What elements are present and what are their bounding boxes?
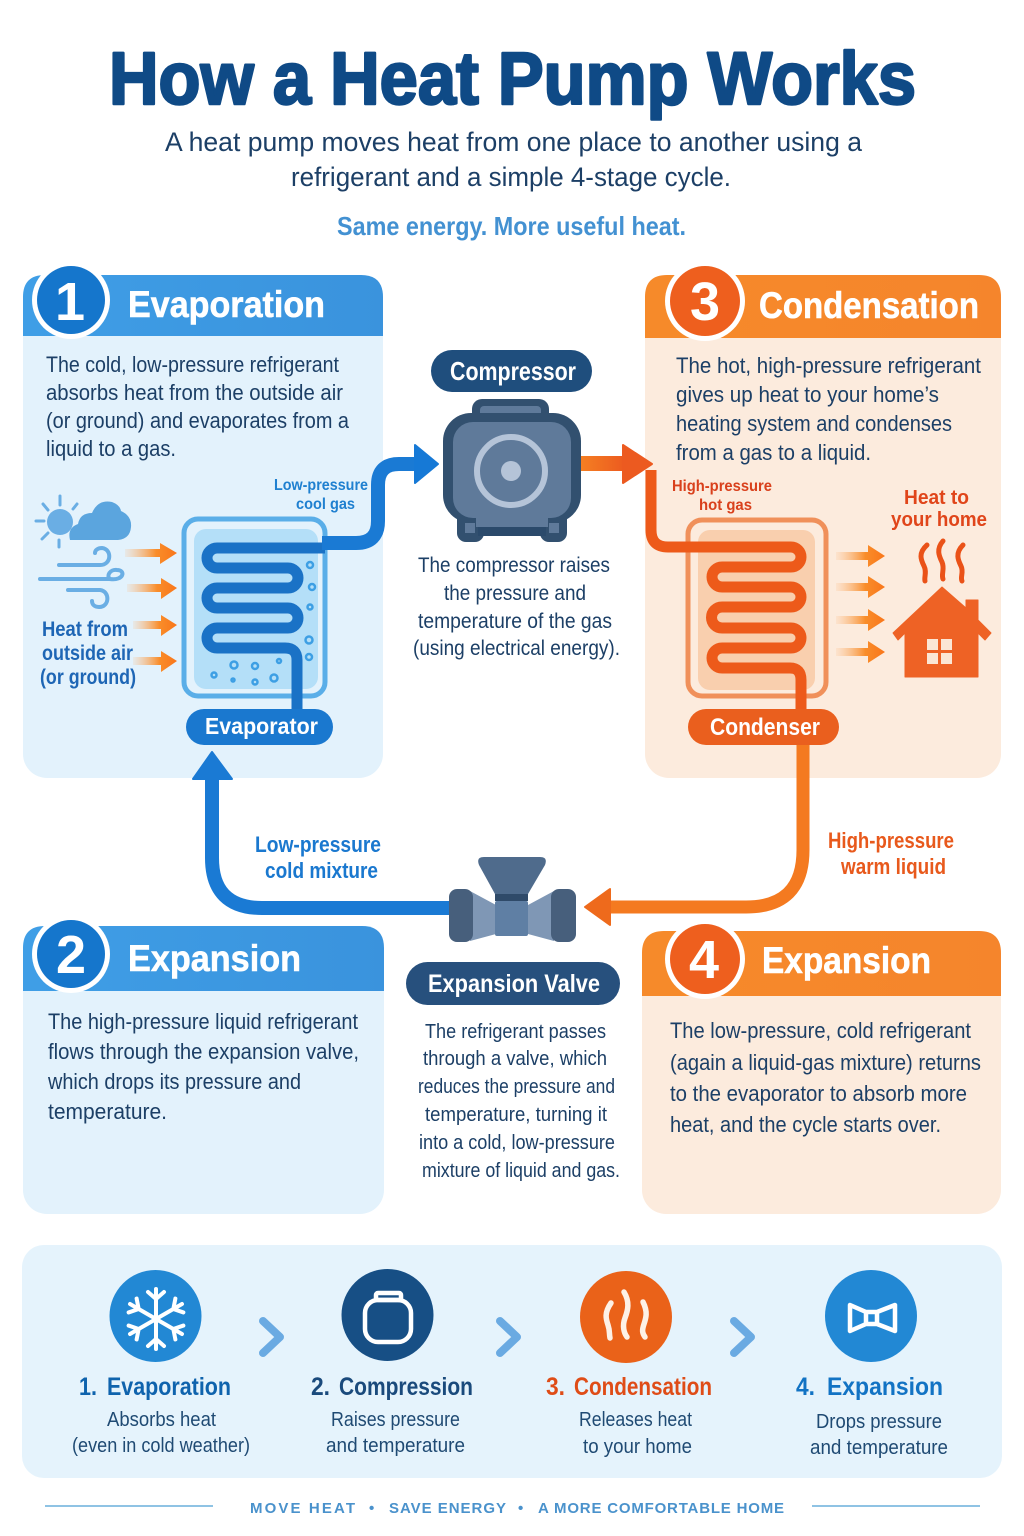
number badge 3: 3	[690, 272, 720, 332]
evaporation description: The cold, low-pressure refrigerant	[46, 352, 339, 377]
label: low-pressure cold mixture: Low-pressure	[255, 832, 381, 857]
step 3 text: Releases heat	[579, 1409, 692, 1431]
number badge 1: 1	[55, 272, 85, 332]
label: low-pressure cold mixture: cold mixture	[265, 858, 378, 883]
label: low-pressure cool gas: cool gas	[296, 496, 355, 513]
step 1 text: (even in cold weather)	[72, 1435, 250, 1457]
panel: evaporation	[23, 261, 383, 778]
icon: compressor	[443, 399, 581, 542]
step 2 text: Raises pressure	[331, 1409, 460, 1431]
label: heat from outside air	[40, 617, 136, 689]
step 4 text: Drops pressure	[816, 1411, 942, 1433]
icon: expansion valve	[449, 857, 576, 942]
step 3 text: 3.	[546, 1373, 565, 1401]
subtitle: A heat pump moves heat from one place to another using a	[165, 127, 863, 157]
title: How a Heat Pump Works	[109, 37, 916, 120]
label: heat from outside air: outside air	[42, 641, 134, 665]
tagline: Same energy. More useful heat.	[337, 211, 686, 241]
expansion valve description	[418, 1021, 620, 1182]
icon: snowflake	[110, 1270, 202, 1362]
arrow: cold mixture to evaporator	[193, 752, 449, 908]
arrow: compressor to condenser	[581, 445, 652, 483]
footer: MOVE HEAT	[250, 1500, 355, 1517]
step 4 text: Expansion	[827, 1373, 943, 1401]
expansion description: which drops its pressure and	[47, 1069, 301, 1094]
label: high-pressure hot gas: High-pressure	[672, 478, 772, 495]
condenser unit	[651, 470, 826, 715]
step 4 text	[796, 1373, 948, 1459]
step 2 text: and temperature	[326, 1435, 465, 1457]
chevron 1	[263, 1321, 280, 1353]
return description: to the evaporator to absorb more	[670, 1081, 967, 1106]
footer: A MORE COMFORTABLE HOME	[538, 1500, 784, 1517]
compressor description: The compressor raises	[418, 554, 610, 577]
compressor label	[431, 350, 592, 392]
label: high-pressure warm liquid: High-pressure	[828, 828, 954, 853]
expansion valve description: reduces the pressure and	[418, 1076, 615, 1098]
label: low-pressure cool gas: Low-pressure	[274, 477, 368, 494]
chevron 3	[734, 1321, 751, 1353]
step 1 text: Absorbs heat	[107, 1409, 216, 1431]
compressor label: Compressor	[450, 356, 576, 386]
step 3 text: to your home	[583, 1436, 692, 1458]
arrow: gas to compressor	[322, 445, 438, 543]
label: low-pressure cold mixture	[255, 832, 381, 883]
label: heat to your home	[891, 487, 987, 531]
arrow: warm liquid to valve	[585, 745, 803, 925]
footer	[45, 1500, 980, 1517]
icon: house with heat waves	[893, 541, 991, 677]
panel: expansion left	[23, 915, 384, 1214]
icon: sun and cloud	[36, 496, 131, 547]
condenser label	[688, 709, 839, 745]
footer: SAVE ENERGY	[389, 1500, 506, 1517]
evaporation description	[46, 352, 350, 461]
heading: expansion: Expansion	[128, 938, 301, 979]
step 2 text	[311, 1373, 473, 1457]
heading: expansion: Expansion	[762, 940, 931, 981]
evaporator label: Evaporator	[205, 713, 318, 739]
heading: evaporation: Evaporation	[128, 284, 325, 325]
arrows: heat into evaporator	[125, 543, 177, 672]
step 4 text: 4.	[796, 1373, 815, 1401]
condensation description: from a gas to a liquid.	[676, 440, 871, 465]
condensation description	[676, 353, 981, 465]
heading: condensation: Condensation	[759, 285, 979, 326]
condensation description: The hot, high-pressure refrigerant	[676, 353, 981, 378]
evaporation description: (or ground) and evaporates from a	[46, 408, 350, 433]
expansion valve description: temperature, turning it	[425, 1104, 607, 1126]
return description: The low-pressure, cold refrigerant	[670, 1018, 971, 1043]
step 2 text: Compression	[339, 1373, 473, 1401]
arrows: heat to home	[836, 545, 885, 663]
expansion valve label: Expansion Valve	[428, 970, 600, 998]
panel: expansion right	[642, 919, 1001, 1214]
condenser label: Condenser	[710, 714, 820, 741]
step 1 text: 1.	[79, 1373, 97, 1401]
evaporation description: absorbs heat from the outside air	[46, 380, 343, 405]
label: heat to your home: your home	[891, 509, 987, 531]
step 2 text: 2.	[311, 1373, 330, 1401]
compressor description: (using electrical energy).	[413, 637, 620, 660]
expansion valve description: The refrigerant passes	[425, 1021, 606, 1043]
return description	[670, 1018, 981, 1137]
compressor description: the pressure and	[444, 582, 586, 605]
icon: wind	[40, 548, 122, 607]
label: heat to your home: Heat to	[904, 487, 969, 509]
icon: compressor tank	[342, 1269, 434, 1361]
icon: valve	[825, 1270, 917, 1362]
icon: heat waves	[580, 1271, 672, 1363]
condensation description: gives up heat to your home’s	[676, 382, 939, 407]
footer: •	[518, 1500, 523, 1517]
label: heat from outside air: (or ground)	[40, 665, 136, 689]
compressor description: temperature of the gas	[418, 610, 612, 633]
step 3 text	[546, 1373, 712, 1458]
return description: heat, and the cycle starts over.	[670, 1112, 941, 1137]
chevron 2	[500, 1321, 517, 1353]
return description: (again a liquid-gas mixture) returns	[670, 1050, 981, 1075]
subtitle	[165, 127, 863, 192]
expansion valve description: into a cold, low-pressure	[419, 1132, 615, 1154]
expansion description: The high-pressure liquid refrigerant	[48, 1009, 358, 1034]
number badge 2: 2	[56, 925, 86, 985]
expansion description: flows through the expansion valve,	[48, 1039, 359, 1064]
expansion description: temperature.	[48, 1099, 167, 1124]
evaporator unit	[184, 519, 325, 712]
label: high-pressure hot gas: hot gas	[699, 497, 752, 514]
expansion valve label	[406, 962, 620, 1005]
expansion valve description: mixture of liquid and gas.	[422, 1160, 620, 1182]
evaporation description: liquid to a gas.	[46, 436, 176, 461]
step 1 text	[72, 1373, 250, 1457]
step 3 text: Condensation	[574, 1373, 712, 1401]
expansion description	[47, 1009, 359, 1124]
panel: condensation	[645, 261, 1001, 778]
footer: •	[369, 1500, 374, 1517]
condensation description: heating system and condenses	[676, 411, 952, 436]
label: high-pressure warm liquid: warm liquid	[840, 854, 946, 879]
evaporator label	[186, 709, 333, 745]
label: high-pressure warm liquid	[828, 828, 954, 879]
label: high-pressure hot gas	[672, 478, 772, 514]
label: heat from outside air: Heat from	[42, 617, 128, 641]
number badge 4: 4	[689, 930, 719, 990]
subtitle: refrigerant and a simple 4-stage cycle.	[291, 162, 731, 192]
step 1 text: Evaporation	[107, 1373, 231, 1401]
panel: cycle summary	[22, 1245, 1002, 1478]
step 4 text: and temperature	[810, 1437, 948, 1459]
compressor description	[413, 554, 620, 660]
label: low-pressure cool gas	[274, 477, 368, 513]
expansion valve description: through a valve, which	[423, 1048, 607, 1070]
